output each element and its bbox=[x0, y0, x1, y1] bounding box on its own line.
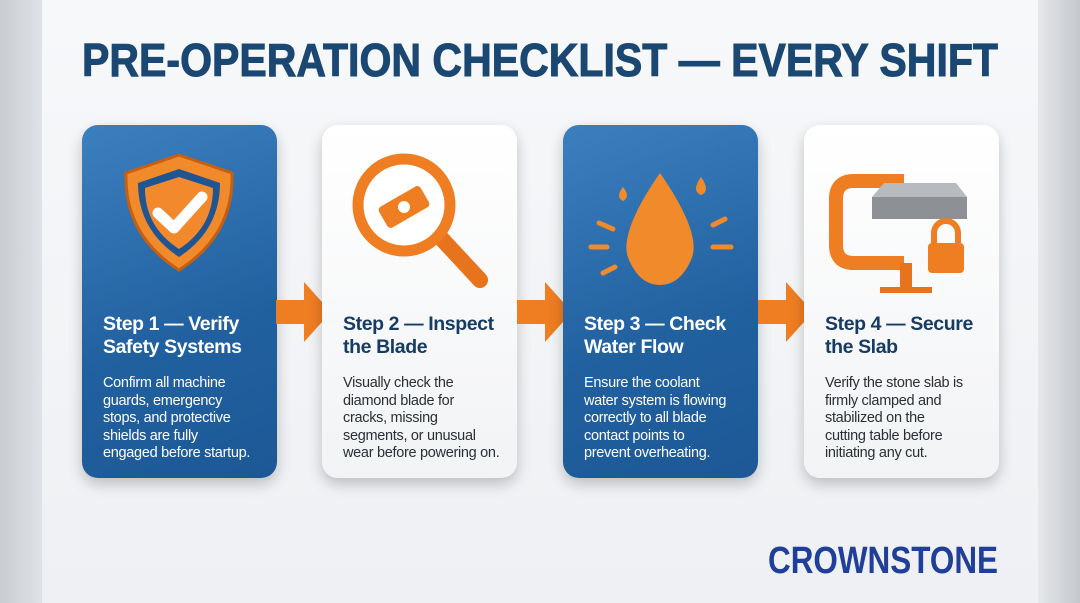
text: guards, emergency bbox=[103, 392, 222, 408]
heading bbox=[584, 313, 726, 358]
text: segments, or unusual bbox=[343, 428, 476, 444]
text: firmly clamped and bbox=[825, 392, 941, 408]
text bbox=[584, 375, 726, 461]
text: prevent overheating. bbox=[584, 445, 710, 461]
heading: Safety Systems bbox=[103, 336, 242, 358]
text: Visually check the bbox=[343, 375, 453, 391]
heading bbox=[343, 313, 494, 358]
text: stops, and protective bbox=[103, 410, 230, 426]
text: stabilized on the bbox=[825, 410, 925, 426]
text: Confirm all machine bbox=[103, 375, 225, 391]
text bbox=[343, 375, 499, 461]
arrow 1 bbox=[276, 282, 322, 342]
card 1 bbox=[82, 125, 277, 478]
text bbox=[825, 375, 963, 461]
icon: clamp with slab and lock bbox=[829, 174, 967, 293]
text: cracks, missing bbox=[343, 410, 438, 426]
title: PRE-OPERATION CHECKLIST — EVERY SHIFT bbox=[82, 34, 998, 86]
icon: water drop bbox=[588, 173, 734, 285]
text: cutting table before bbox=[825, 428, 942, 444]
heading: Water Flow bbox=[584, 336, 683, 358]
card 4 bbox=[804, 125, 999, 478]
heading: Step 1 — Verify bbox=[103, 313, 239, 335]
heading: Step 3 — Check bbox=[584, 313, 726, 335]
text: shields are fully bbox=[103, 428, 198, 444]
text: diamond blade for bbox=[343, 392, 454, 408]
arrow 2 bbox=[517, 282, 563, 342]
text: engaged before startup. bbox=[103, 445, 250, 461]
text: Ensure the coolant bbox=[584, 375, 700, 391]
arrow 3 bbox=[758, 282, 804, 342]
text: correctly to all blade bbox=[584, 410, 706, 426]
text bbox=[103, 375, 250, 461]
heading: the Slab bbox=[825, 336, 898, 358]
text: water system is flowing bbox=[584, 392, 726, 408]
heading bbox=[825, 313, 973, 358]
heading: the Blade bbox=[343, 336, 427, 358]
card 2 bbox=[322, 125, 517, 478]
heading: Step 4 — Secure bbox=[825, 313, 973, 335]
heading bbox=[103, 313, 242, 358]
text: contact points to bbox=[584, 428, 684, 444]
heading: Step 2 — Inspect bbox=[343, 313, 494, 335]
icon: magnifier bbox=[352, 154, 488, 288]
text: initiating any cut. bbox=[825, 445, 927, 461]
icon: shield bbox=[124, 153, 234, 272]
card 3 bbox=[563, 125, 758, 478]
text: wear before powering on. bbox=[343, 445, 499, 461]
text: Verify the stone slab is bbox=[825, 375, 963, 391]
